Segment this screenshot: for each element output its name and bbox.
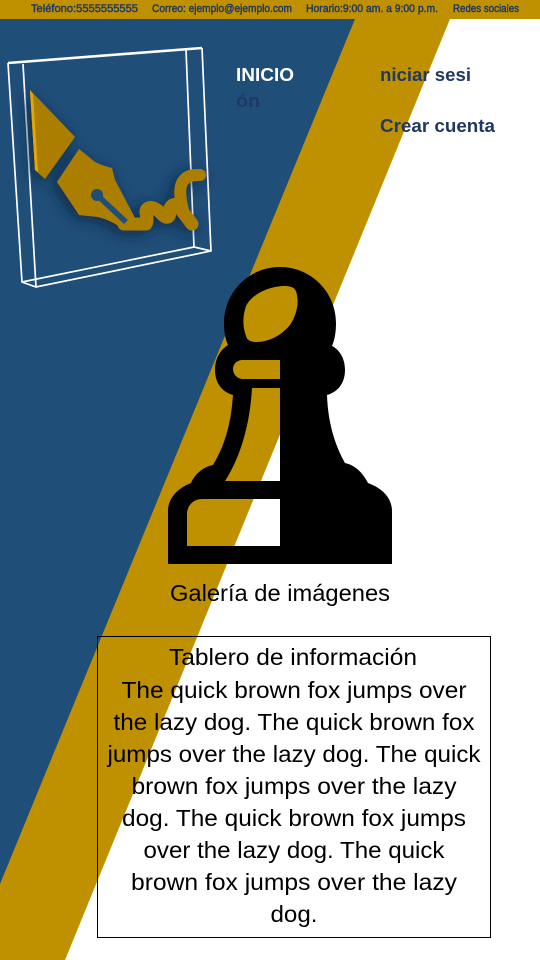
nav: iniciar sesión, first line: niciar sesi — [380, 65, 471, 85]
gallery caption: Galería de imágenes — [170, 580, 390, 606]
board text: The quick brown fox jumps over — [122, 677, 467, 703]
board text: brown fox jumps over the lazy — [132, 773, 457, 799]
board text: jumps over the lazy dog. The quick — [106, 741, 481, 767]
pen drawing — [30, 90, 200, 230]
board text: the lazy dog. The quick brown fox — [114, 709, 475, 735]
logo frame — [8, 48, 211, 287]
panel: information board — [98, 636, 490, 938]
contact: phone: Teléfono:5555555555 — [31, 3, 138, 15]
background: blue diagonal panel — [0, 19, 355, 884]
icon: pen logo in glass frame — [8, 48, 211, 287]
board heading: Tablero de información — [169, 644, 417, 670]
contact: email: Correo: ejemplo@ejemplo.com — [152, 3, 292, 15]
top contact bar — [0, 0, 540, 19]
board text: dog. — [270, 901, 318, 927]
board text — [106, 677, 481, 927]
nav: inicio: INICIO — [236, 65, 294, 85]
nav: iniciar sesión, wrapped ending: ón — [236, 91, 260, 111]
board text: over the lazy dog. The quick — [144, 837, 445, 863]
nav: crear cuenta: Crear cuenta — [380, 116, 496, 136]
contact: social: Redes sociales — [453, 3, 519, 15]
contact: hours: Horario:9:00 am. a 9:00 p.m. — [306, 3, 438, 15]
board text: dog. The quick brown fox jumps — [122, 805, 466, 831]
icon: chess pawn — [168, 267, 392, 564]
board text: brown fox jumps over the lazy — [131, 869, 457, 895]
